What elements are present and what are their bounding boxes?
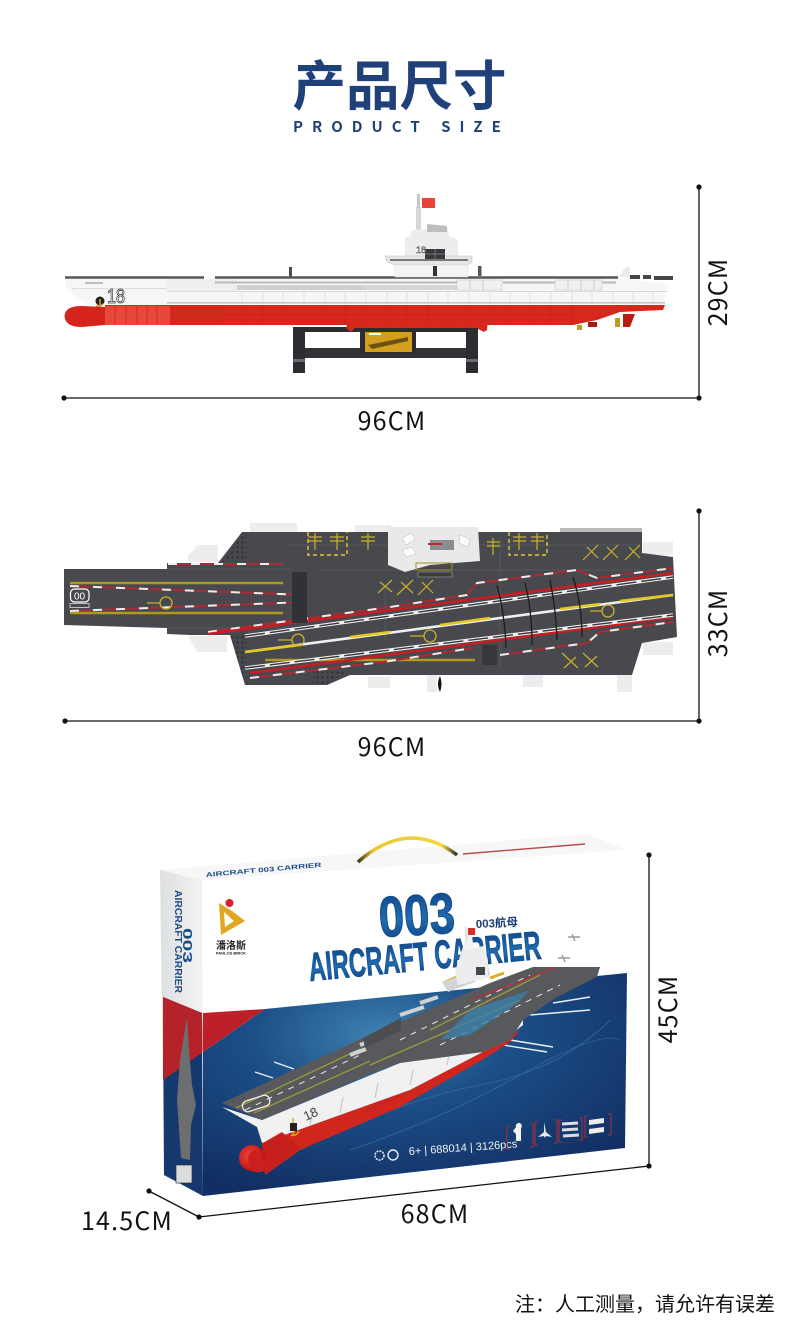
box top face: [160, 834, 627, 880]
arresting wires: [497, 577, 582, 648]
yellow deck crosses: [308, 533, 640, 668]
box front face: [202, 850, 627, 1196]
box left side face: AIRCRAFT CARRIER: [172, 890, 183, 994]
landing circles: [147, 597, 614, 646]
sea wave lines: [300, 1020, 620, 1150]
top face title: AIRCRAFT 003 CARRIER: [206, 862, 322, 879]
ship guide ropes: [255, 997, 590, 1078]
central yellow and white line: [245, 595, 673, 652]
vehicles icon: [589, 1118, 604, 1134]
dimension: box height 45CM: [646, 852, 685, 1169]
sponsons: [188, 523, 673, 692]
island superstructure: 18: [416, 245, 426, 255]
brand logo: PANLOS BRICK: [216, 950, 246, 956]
top face red ship line: [463, 844, 585, 854]
dimension: box length 68CM: [196, 1166, 649, 1231]
tail yellow lines: [70, 583, 283, 613]
dimension: side length 96CM: 96CM: [358, 402, 426, 438]
white catapult tracks: [245, 577, 673, 668]
ship number on box: 18: [301, 1104, 320, 1124]
box deck number: [241, 1094, 271, 1113]
dimension: box depth 14.5CM: [81, 1188, 199, 1238]
flight deck edge: [65, 276, 618, 279]
box info strip: [375, 1114, 611, 1160]
deck number 00: [70, 589, 89, 608]
hull white upper: [65, 278, 668, 305]
red flag: [422, 198, 435, 208]
minifigure icon: [513, 1123, 522, 1141]
helicopters icon: [562, 1123, 579, 1136]
rudders and propellers: [345, 314, 635, 332]
blue jets on deck: [440, 990, 530, 1040]
accessory brackets: [507, 1114, 611, 1149]
dimension: top length 96CM: [62, 508, 702, 764]
red runway lines: [208, 573, 673, 673]
fighter jet icon: [538, 1122, 552, 1138]
label 003 carrier: 003航母: [475, 915, 518, 931]
dimension: box depth 14.5CM: 14.5CM: [81, 1202, 173, 1238]
elevators: [292, 572, 307, 623]
product box: [160, 834, 627, 1196]
flight deck on box: [222, 967, 600, 1120]
deck number 00: 00: [74, 592, 85, 602]
island superstructure: [385, 194, 472, 277]
brand logo: 潘洛斯: [216, 939, 246, 952]
side ship image: [177, 1017, 196, 1160]
island on box: [442, 927, 490, 992]
bow bulb on box: [263, 1132, 300, 1175]
barcode: [176, 1165, 192, 1183]
dimension: height 29CM: 29CM: [699, 258, 735, 326]
white hull: [222, 1010, 523, 1143]
dimension: box height 45CM: 45CM: [649, 975, 685, 1043]
dimension: side length 96CM: [61, 184, 702, 438]
bow bulb: [64, 306, 105, 327]
title: 产品尺寸: [292, 44, 506, 121]
deck surface: [64, 532, 677, 685]
dark island base: [363, 1018, 401, 1048]
red hull: [262, 1030, 520, 1175]
red and white dashed deck lines: [70, 564, 673, 678]
elevator frames: [308, 532, 547, 555]
dimension: box length 68CM: 68CM: [401, 1195, 469, 1231]
box handle: [358, 838, 457, 862]
side view of aircraft carrier model: [64, 194, 673, 373]
certification icons: [375, 1150, 398, 1160]
dimension: top length 96CM: 96CM: [358, 728, 426, 764]
box left side face: 003: [180, 928, 195, 963]
dimension: width 33CM: 33CM: [699, 589, 735, 657]
display stand: [293, 327, 478, 373]
red hull: [105, 305, 665, 328]
box left side face: [160, 870, 203, 1196]
box title aircraft carrier: AIRCRAFT CARRIER: [307, 924, 543, 990]
ship on box: [222, 927, 600, 1175]
top view of flight deck: [64, 523, 677, 692]
brand logo: [216, 899, 246, 956]
box title 003: 003: [377, 881, 457, 950]
footnote: 注：人工测量，请允许有误差: [515, 1288, 775, 1317]
small jets in sky: [558, 934, 580, 962]
subtitle: product size: PRODUCT SIZE: [293, 116, 510, 137]
deck balconies: [457, 280, 502, 290]
anchor: [96, 296, 104, 306]
deck jets: [350, 980, 475, 1055]
box info strip: 6+ | 688014 | 3126pcs: [408, 1138, 518, 1158]
island top: [388, 527, 480, 577]
hull number 18: 18: [107, 286, 125, 308]
anchor on box: [290, 1118, 299, 1136]
